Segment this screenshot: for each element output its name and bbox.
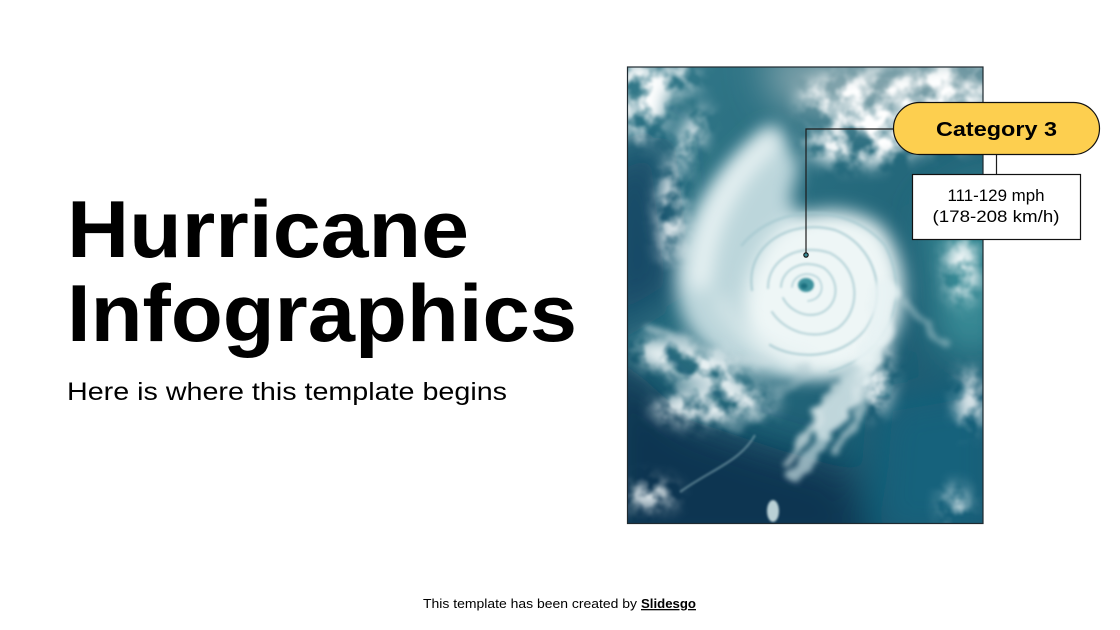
category label pill: Category 3 [936,118,1057,141]
connector between label and detail box [996,155,998,174]
photo border [628,67,983,524]
lower left cloud bands [624,330,967,523]
title: Infographics [67,269,577,359]
small cloud near bottom [767,500,779,522]
bright swirl core [745,211,903,374]
lower right arm and tail streaks [650,290,950,478]
category label pill [894,102,1100,154]
hurricane satellite photo [628,68,982,523]
subtitle: Here is where this template begins [67,378,507,406]
upper cloud band [612,58,1000,432]
footer credit: Slidesgo [641,596,696,611]
leader line from storm eye to label [804,129,893,257]
eye [798,278,814,292]
thin wispy cloud line lower left [680,435,755,492]
title: Hurricane [67,185,469,275]
broad swirl arm sweeping from top to lower left [675,125,870,379]
wind speed box: (178-208 km/h) [932,207,1060,226]
footer credit: This template has been created by [423,596,638,611]
title [67,185,577,359]
wind speed box: 111-129 mph [948,186,1044,205]
ocean tones [628,68,982,523]
upper left arm highlight [700,140,810,360]
cloud grooves around the eye [742,213,896,372]
wind speed box [912,174,1080,240]
